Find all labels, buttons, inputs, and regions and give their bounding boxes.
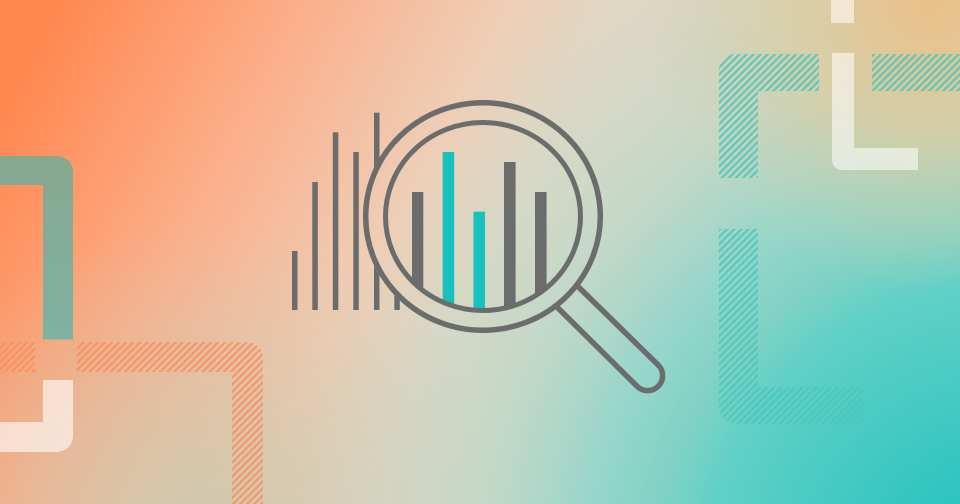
magnifier outer ring (366, 103, 600, 330)
left decorative frame: hatched corner (77, 342, 263, 504)
right decorative frame: hatched bottom corner (719, 229, 863, 424)
right decorative frame: pale top tab (831, 0, 854, 23)
icon: bars outside magnifier (292, 113, 400, 310)
bar: grey one (412, 192, 424, 288)
left decorative frame: hatched left piece (0, 342, 35, 372)
bar: grey two (504, 162, 516, 322)
icon: magnifying glass (366, 103, 663, 391)
bar: grey three (535, 192, 547, 293)
left decorative frame: pale corner (0, 380, 73, 452)
bar: teal short (474, 212, 485, 308)
icon: bars inside magnifier (412, 152, 547, 322)
right decorative frame: hatched top corner (719, 54, 819, 178)
bar: teal tall (443, 152, 454, 322)
right decorative frame: hatched top right piece (872, 54, 960, 91)
magnifier inner ring (386, 122, 580, 310)
right decorative frame: pale corner (832, 53, 918, 170)
magnifier handle (558, 286, 663, 391)
left decorative frame: green corner (0, 156, 73, 340)
